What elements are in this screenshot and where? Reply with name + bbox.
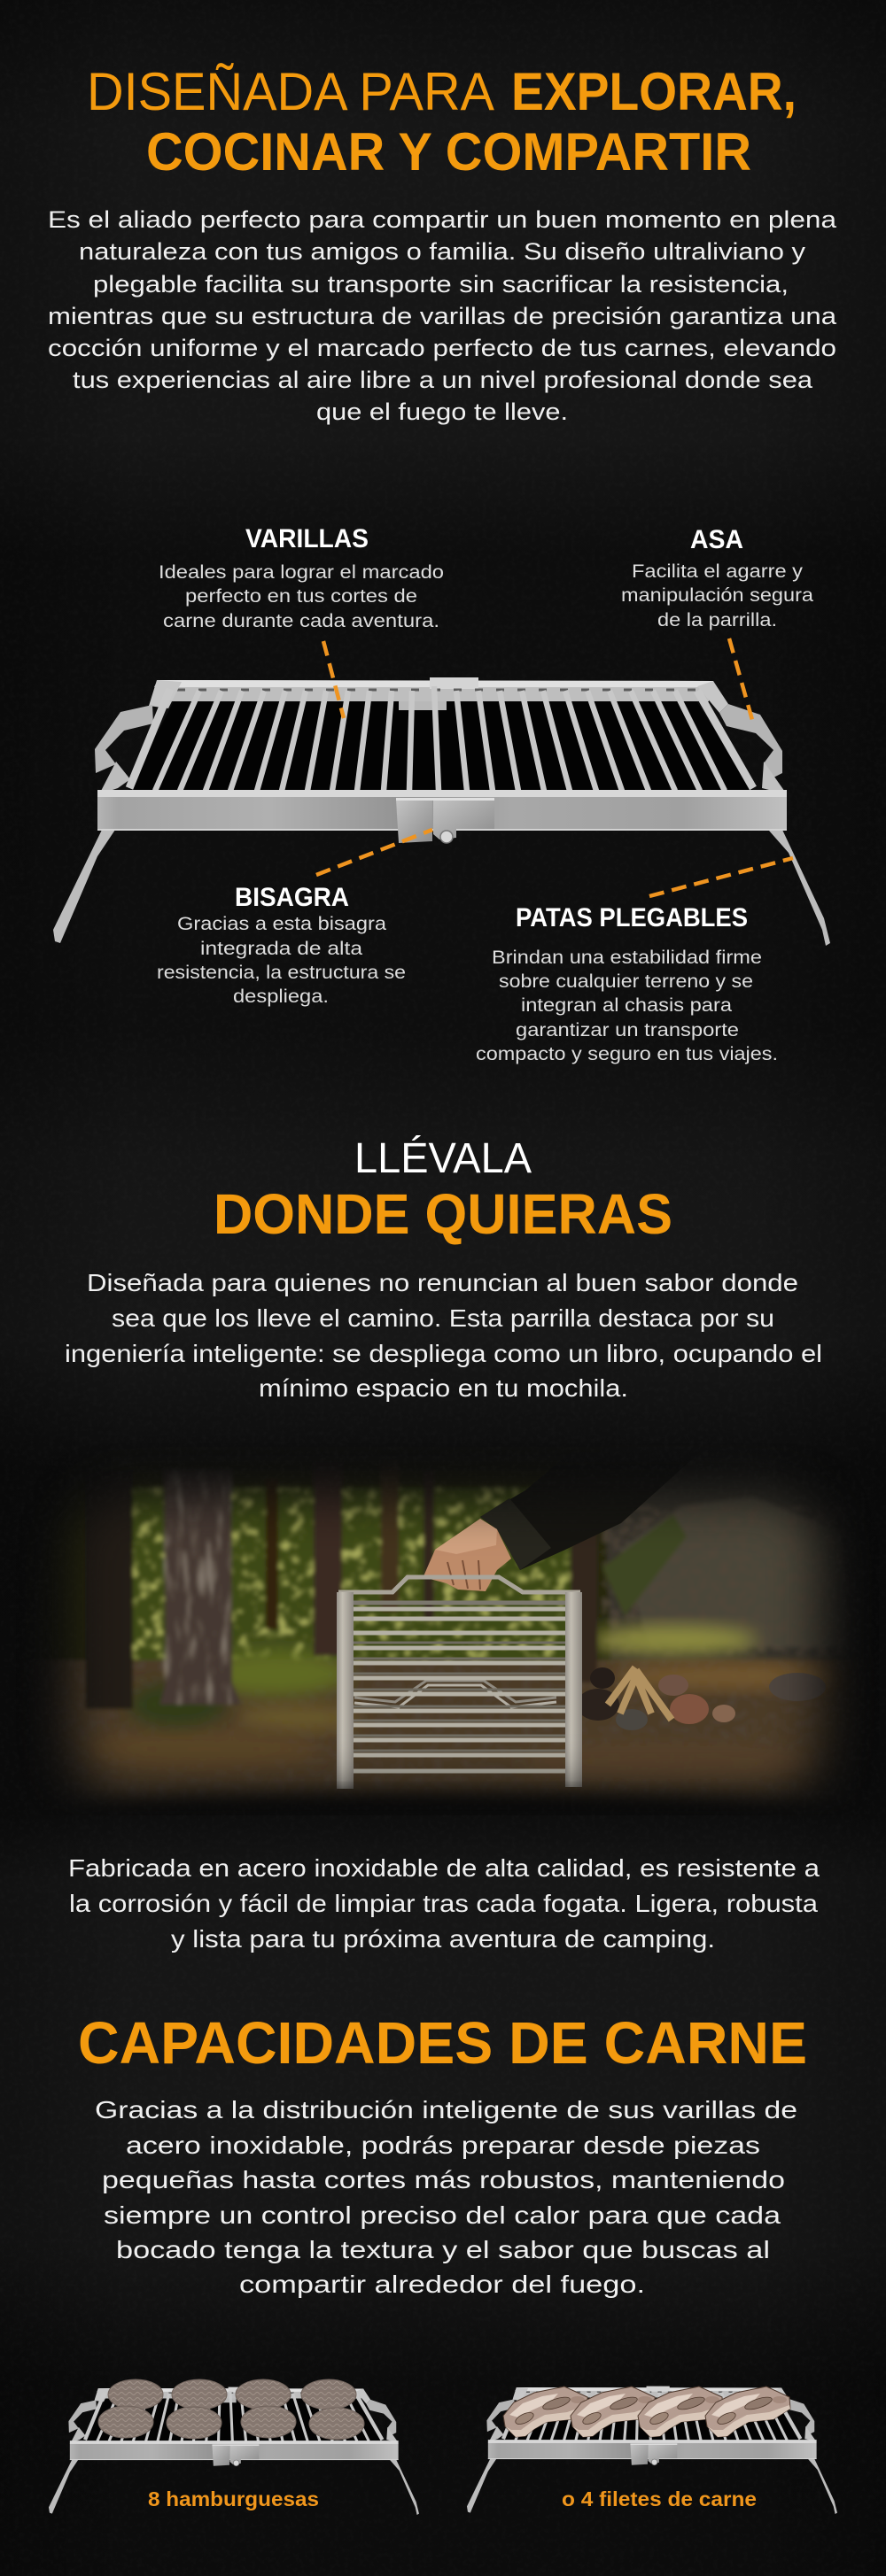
- panel: 4 steaks on grill: o 4 filetes de carne: [562, 2487, 757, 2510]
- text: portability: ingeniería inteligente: se despliega como un libro, ocupando el: [65, 1340, 822, 1367]
- text: material: Fabricada en acero inoxidable de alta calidad, es resistente a: [68, 1854, 820, 1882]
- folded grill: [337, 1577, 582, 1789]
- callout: bisagra: resistencia, la estructura se: [157, 963, 406, 983]
- callout: patas plegables: Brindan una estabilidad firme: [492, 948, 762, 968]
- text: material: la corrosión y fácil de limpiar tras cada fogata. Ligera, robusta: [69, 1890, 818, 1917]
- heading: llévala donde quieras: DONDE QUIERAS: [214, 1182, 672, 1246]
- callout: asa: Facilita el agarre y: [632, 561, 804, 582]
- text: capacities: bocado tenga la textura y el sabor que buscas al: [116, 2236, 770, 2263]
- text: portability: sea que los lleve el camino. Esta parrilla destaca por su: [112, 1304, 774, 1332]
- panel: 4 steaks on grill: [467, 2386, 837, 2514]
- callout: bisagra: integrada de alta: [200, 939, 362, 959]
- text: capacities: Gracias a la distribución inteligente de sus varillas de: [95, 2096, 797, 2123]
- intro text: mientras que su estructura de varillas de precisión garantiza una: [48, 303, 837, 329]
- intro text: tus experiencias al aire libre a un nivel profesional donde sea: [73, 367, 813, 393]
- callout: patas plegables: [476, 858, 793, 1064]
- text: material: [68, 1854, 820, 1953]
- title: DISEÑADA PARA: [87, 62, 494, 121]
- text: capacities: acero inoxidable, podrás preparar desde piezas: [126, 2131, 760, 2159]
- callout: varillas: VARILLAS: [245, 524, 369, 553]
- callout: bisagra: BISAGRA: [235, 883, 349, 912]
- intro text: que el fuego te lleve.: [316, 398, 568, 425]
- intro text: cocción uniforme y el marcado perfecto de tus carnes, elevando: [48, 335, 836, 361]
- callout: bisagra: Gracias a esta bisagra: [177, 914, 386, 934]
- callout: asa: ASA: [690, 525, 743, 554]
- text: capacities: compartir alrededor del fuego.: [239, 2270, 645, 2298]
- intro text: Es el aliado perfecto para compartir un buen momento en plena: [48, 206, 837, 233]
- callout: varillas: perfecto en tus cortes de: [185, 586, 417, 607]
- photo background: [49, 1470, 847, 1803]
- product diagram: grill: [53, 677, 830, 946]
- panel: 8 burgers on grill: [49, 2379, 419, 2515]
- title: COCINAR Y COMPARTIR: [146, 122, 751, 182]
- callout: varillas: Ideales para lograr el marcado: [159, 562, 444, 583]
- callout: patas plegables: sobre cualquier terreno y se: [499, 971, 753, 992]
- text: material: y lista para tu próxima aventura de camping.: [171, 1925, 715, 1953]
- intro text: plegable facilita su transporte sin sacrificar la resistencia,: [93, 271, 789, 298]
- text: portability: [65, 1269, 822, 1402]
- hand: [424, 1519, 511, 1591]
- callout: patas plegables: integran al chasis para: [521, 995, 732, 1016]
- text: capacities: [95, 2096, 797, 2298]
- heading: llévala donde quieras: [214, 1135, 672, 1246]
- heading: capacidades de carne: CAPACIDADES DE CARNE: [78, 2010, 807, 2077]
- text: portability: mínimo espacio en tu mochila.: [259, 1374, 628, 1402]
- callout: asa: [621, 525, 813, 726]
- callout: bisagra: despliega.: [233, 986, 329, 1007]
- heading: llévala donde quieras: LLÉVALA: [354, 1135, 532, 1182]
- callout: patas plegables: PATAS PLEGABLES: [516, 903, 748, 932]
- callout: bisagra: [157, 830, 432, 1007]
- callout: varillas: [159, 524, 444, 718]
- intro text: [48, 206, 837, 425]
- callout: asa: de la parrilla.: [657, 610, 777, 630]
- title: EXPLORAR,: [511, 62, 797, 121]
- callout: varillas: carne durante cada aventura.: [163, 611, 439, 631]
- campfire: [577, 1667, 826, 1730]
- text: portability: Diseñada para quienes no renuncian al buen sabor donde: [87, 1269, 798, 1296]
- photo: hand carrying folded grill in forest: [49, 1470, 847, 1801]
- sleeve: [480, 1481, 668, 1570]
- text: capacities: pequeñas hasta cortes más robustos, manteniendo: [102, 2166, 785, 2193]
- panel: 8 burgers on grill: 8 hamburguesas: [148, 2487, 319, 2510]
- callout: asa: manipulación segura: [621, 585, 813, 606]
- callout: patas plegables: compacto y seguro en tus viajes.: [476, 1044, 778, 1064]
- text: capacities: siempre un control preciso del calor para que cada: [104, 2201, 781, 2229]
- intro text: naturaleza con tus amigos o familia. Su diseño ultraliviano y: [79, 238, 806, 265]
- callout: patas plegables: garantizar un transporte: [516, 1020, 739, 1040]
- title: [87, 62, 797, 182]
